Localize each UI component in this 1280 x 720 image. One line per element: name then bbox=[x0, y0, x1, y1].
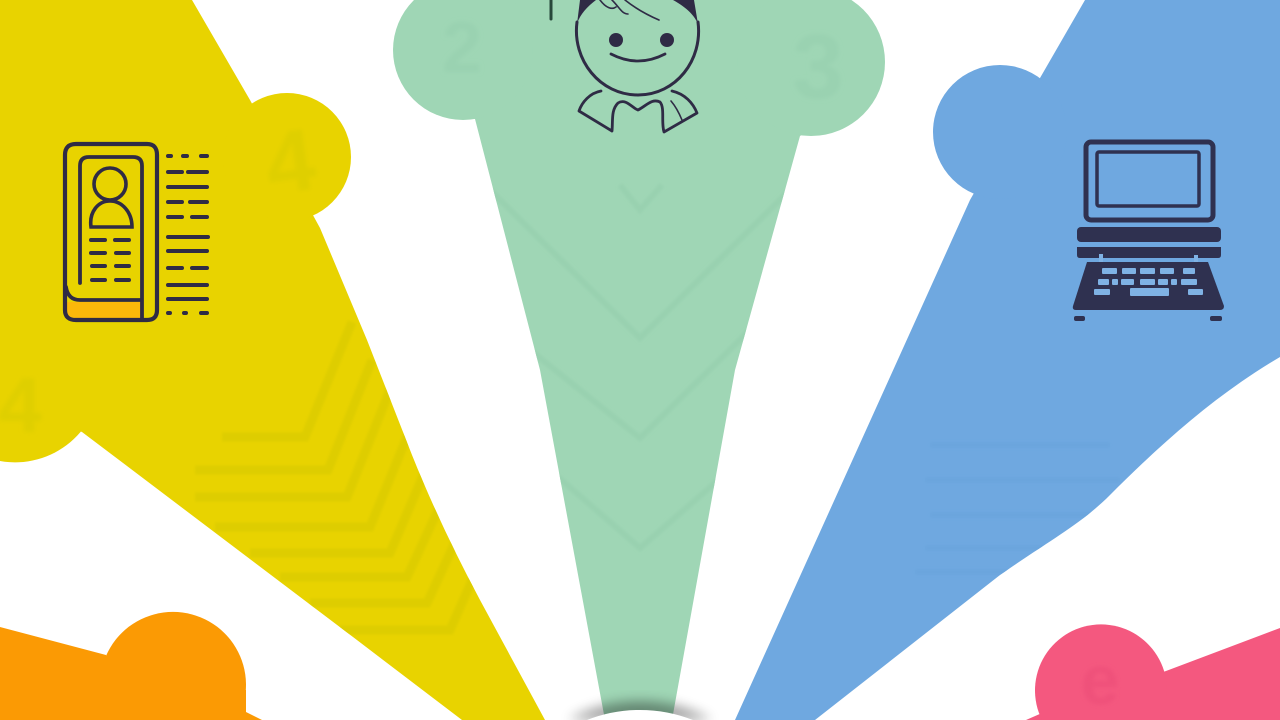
icon: smiling character bbox=[551, 0, 699, 132]
center hub bbox=[568, 701, 712, 720]
chevron watermark: green bbox=[493, 189, 785, 488]
number badge: pink: e bbox=[1081, 641, 1119, 719]
keyboard keys bbox=[1094, 254, 1203, 296]
number badge: yellow upper: 4 bbox=[259, 109, 321, 214]
panel: blue segment bbox=[735, 0, 1280, 720]
hair bbox=[577, 0, 596, 24]
panel: yellow segment bbox=[0, 0, 545, 720]
icon: ID card bbox=[65, 144, 208, 320]
panel: pink segment bbox=[1026, 624, 1280, 720]
panel: green segment bbox=[393, 0, 885, 720]
icon: laptop bbox=[1073, 142, 1224, 321]
chevron watermark: blue bbox=[1000, 512, 1091, 576]
chevron watermark: yellow bbox=[195, 322, 490, 630]
number badge: green right: 3 bbox=[792, 16, 844, 118]
collar bbox=[579, 91, 697, 132]
panel: orange segment bbox=[0, 612, 262, 720]
head bbox=[576, 22, 699, 95]
number badge: green left: 2 bbox=[442, 8, 482, 88]
